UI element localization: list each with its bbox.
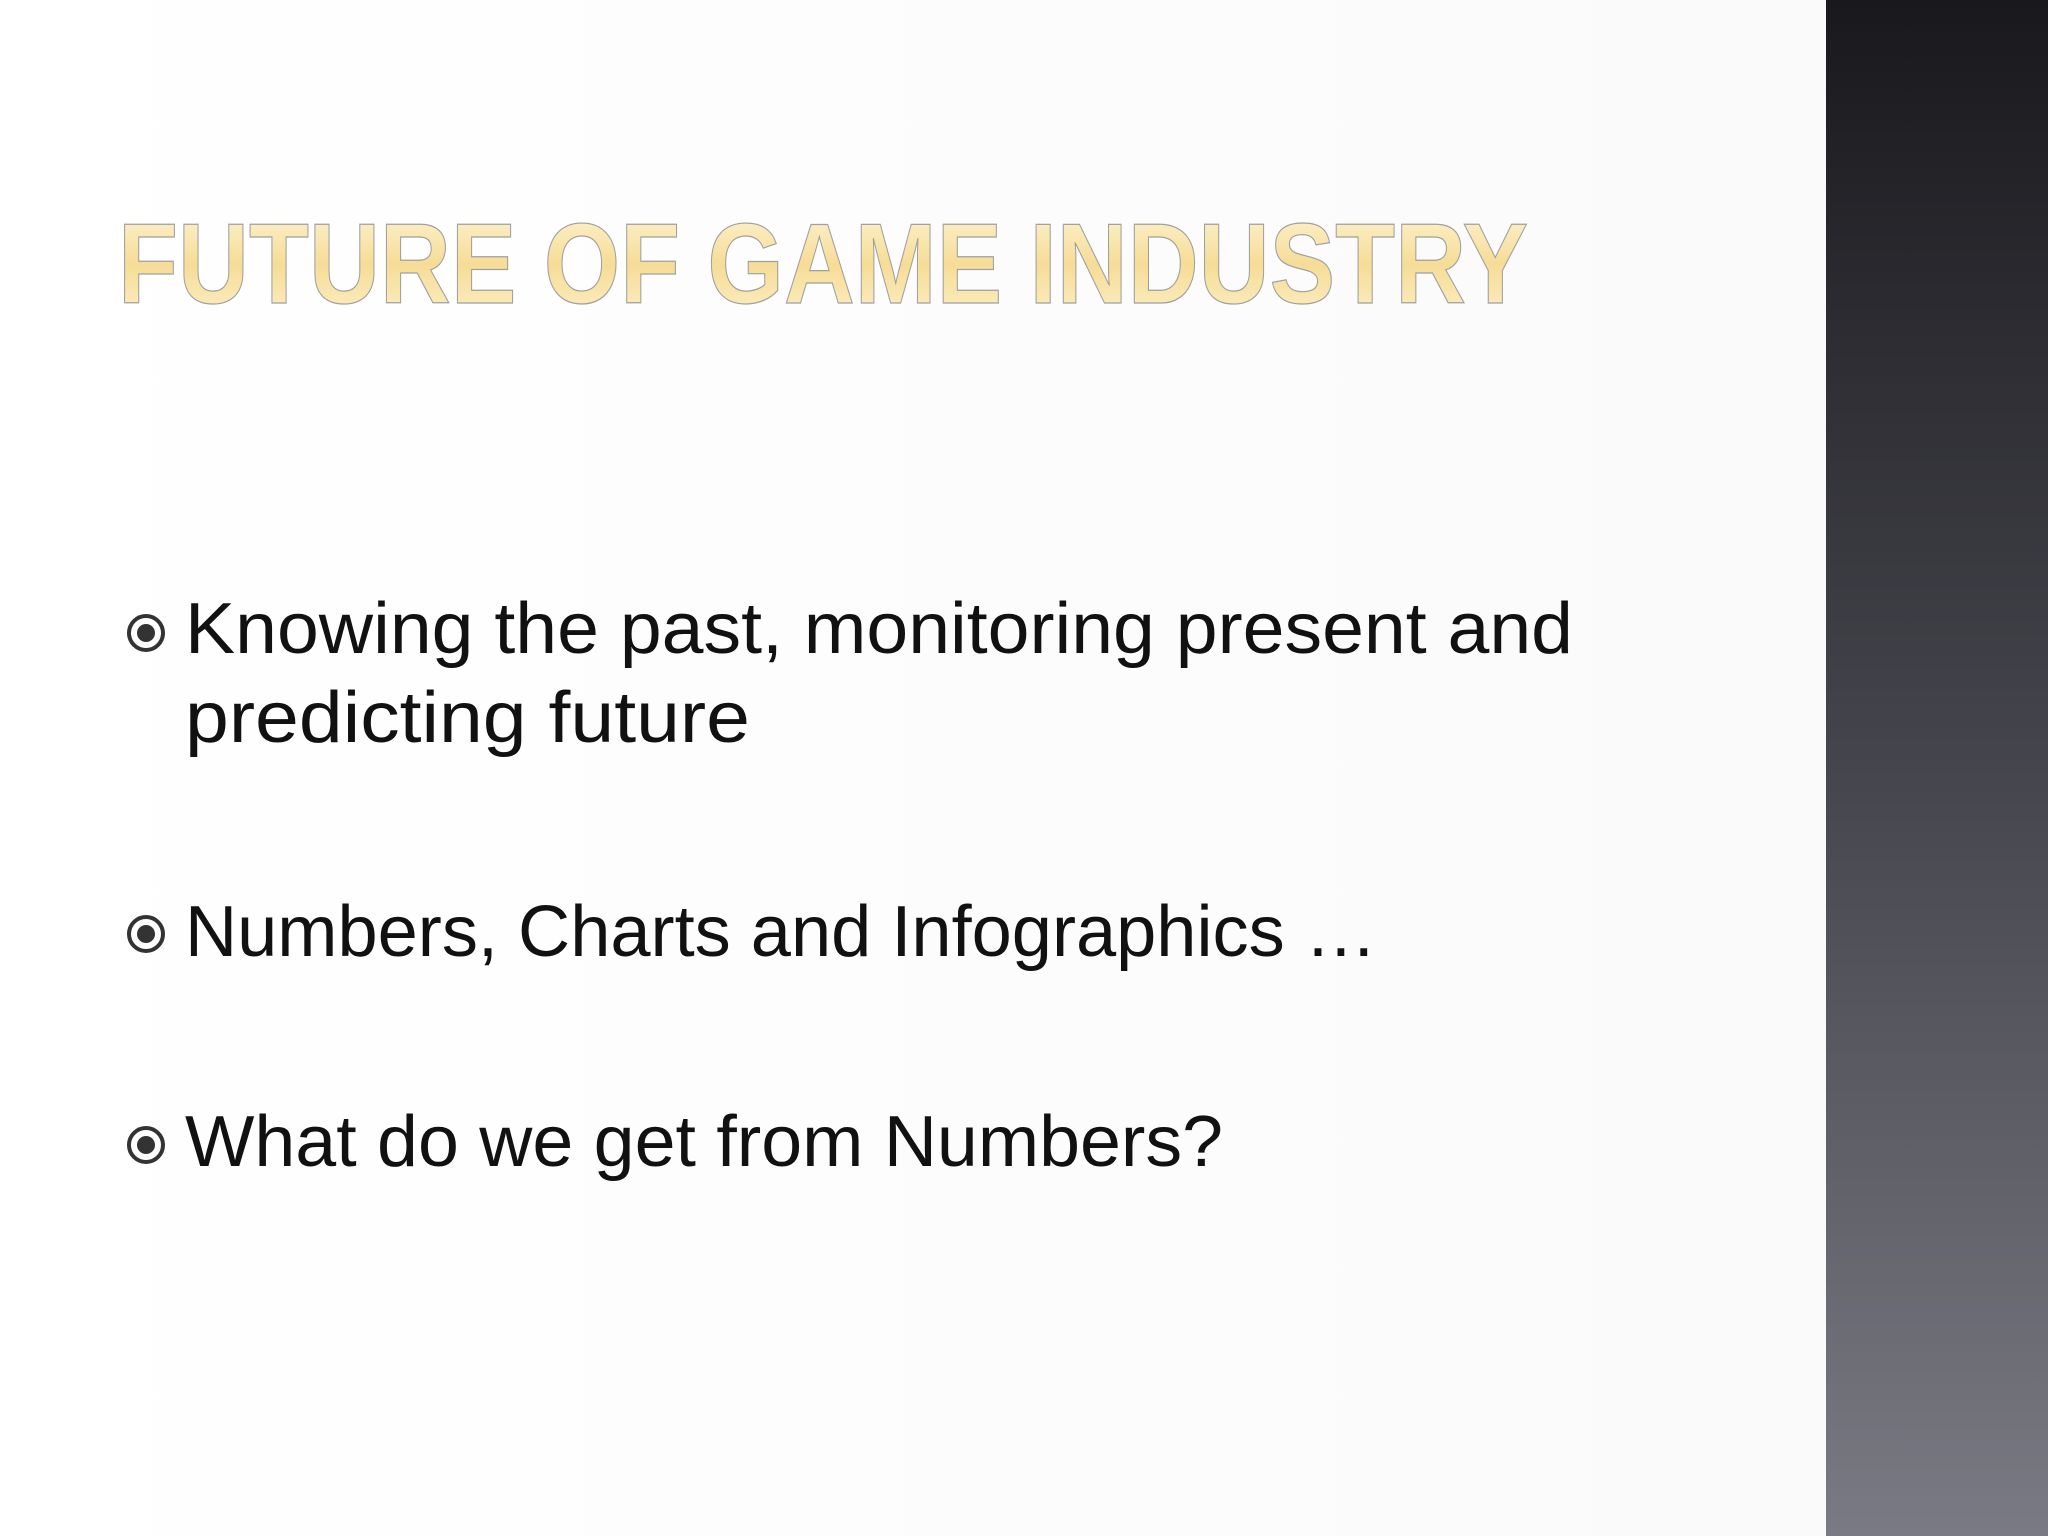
icon: bullet 1 — [129, 616, 163, 650]
text: bullet 1: Knowing the past, monitoring present and — [185, 589, 1573, 669]
text: bullet 3: What do we get from Numbers? — [185, 1102, 1223, 1182]
icon: bullet 2 — [129, 917, 163, 951]
text: bullet 1: predicting future — [185, 678, 750, 758]
title: FUTURE OF GAME INDUSTRY — [118, 201, 1528, 328]
panel: dark side bar — [1826, 0, 2048, 1536]
text: bullet 1 — [185, 589, 1573, 758]
text: bullet 2: Numbers, Charts and Infographics … — [185, 892, 1377, 972]
icon: bullet 3 — [129, 1128, 163, 1162]
bullet list — [129, 589, 1573, 1182]
